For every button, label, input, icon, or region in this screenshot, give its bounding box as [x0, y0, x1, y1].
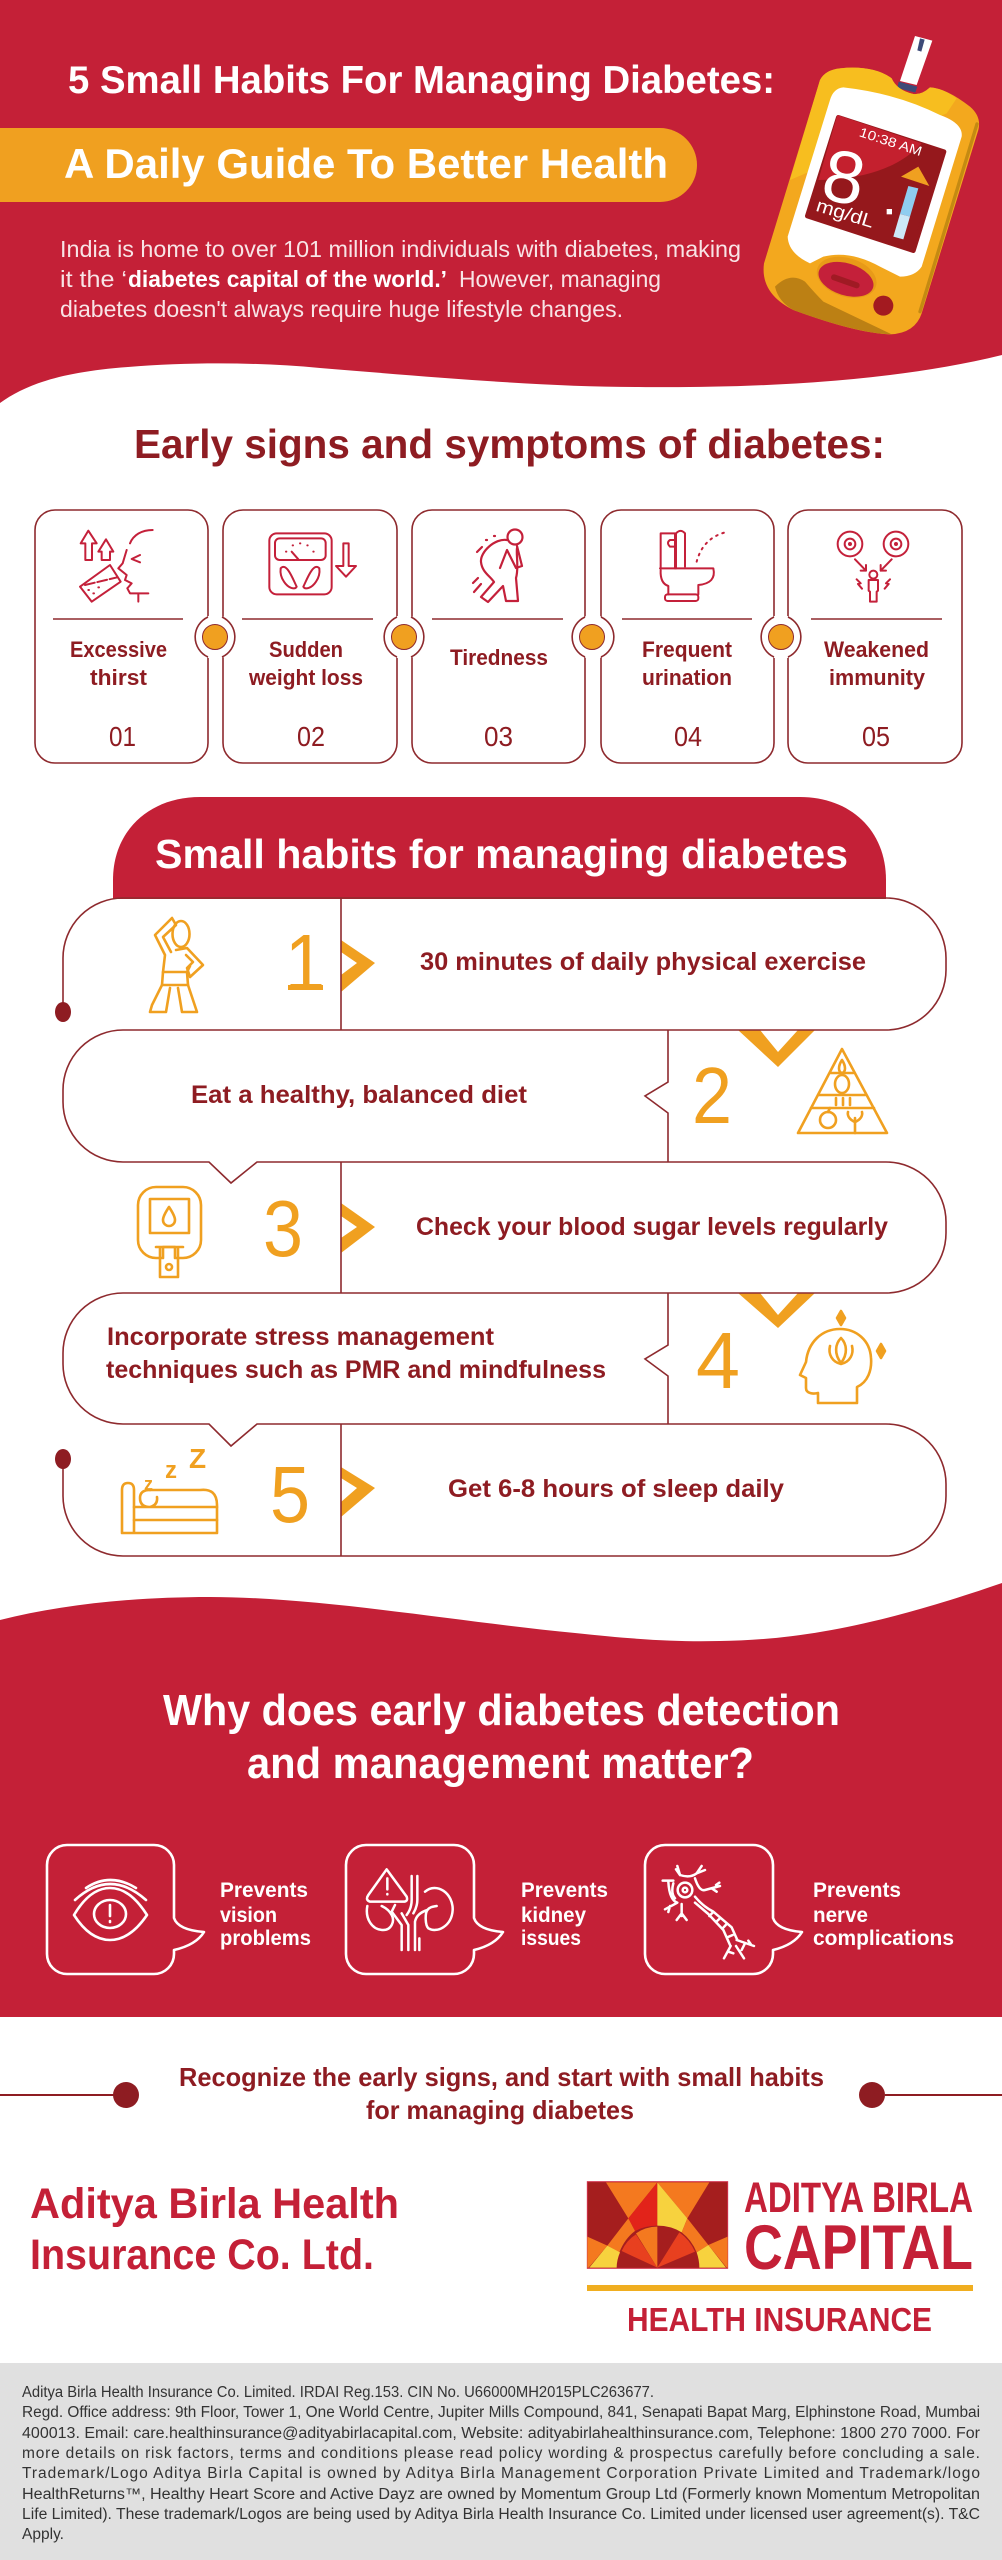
company name: Insurance Co. Ltd.: [30, 2231, 374, 2279]
habit numbers: [263, 918, 740, 1539]
card outlines: [35, 510, 962, 763]
icon: toilet: [660, 531, 728, 601]
logo: Aditya Birla Capital: HEALTH INSURANCE: [627, 2301, 932, 2338]
benefit labels: nerve: [813, 1904, 868, 1927]
benefit labels: problems: [220, 1927, 311, 1950]
habit numbers: 4: [696, 1316, 740, 1405]
habits heading tab: [113, 797, 886, 899]
habit texts: Eat a healthy, balanced diet: [191, 1081, 528, 1109]
icon: excessive thirst: [80, 530, 153, 602]
icon: neuron: [663, 1866, 754, 1958]
icon: sleeping in bed: z: [165, 1457, 177, 1484]
intro paragraph: [60, 236, 741, 322]
icon: sleeping in bed: Z: [189, 1443, 206, 1474]
call to action: for managing diabetes: [366, 2095, 634, 2125]
habit texts: Check your blood sugar levels regularly: [416, 1213, 888, 1241]
section heading: Why does early diabetes detection: [163, 1686, 840, 1735]
benefit labels: vision: [220, 1904, 277, 1927]
panel: legal disclaimer: Regd. Office address: 9th Floor, Tower 1, One World Centre, Jupiter Mills Compound, 841, Senapati Bapat Marg, Elphinstone Road, Mumbai: [22, 2404, 980, 2421]
icon: kidney warning: [367, 1869, 453, 1950]
logo: Aditya Birla Capital: [587, 2174, 973, 2338]
habit numbers: 3: [263, 1184, 303, 1273]
subtitle pill: A Daily Guide To Better Health: [64, 140, 668, 187]
panel: why early detection matters: [0, 1583, 1002, 2017]
speech-box outlines: [47, 1845, 802, 1974]
title: 5 Small Habits For Managing Diabetes:: [68, 59, 775, 102]
icon: tiredness person: [473, 530, 522, 602]
card numbers: 05: [862, 721, 890, 752]
icon: blood sugar meter: [138, 1187, 201, 1277]
intro paragraph: it the ‘: [60, 266, 127, 292]
habit texts: Incorporate stress management: [107, 1323, 495, 1351]
section heading: and management matter?: [247, 1739, 754, 1788]
connector dots: [193, 615, 803, 659]
panel: legal disclaimer: Aditya Birla Health Insurance Co. Limited. IRDAI Reg.153. CIN No. U66000MH2015PLC263677.: [22, 2384, 654, 2401]
intro paragraph: India is home to over 101 million individuals with diabetes, making: [60, 236, 741, 262]
symptom labels: immunity: [829, 665, 926, 690]
company name: Aditya Birla Health: [30, 2180, 399, 2228]
icon: weakened immunity: [838, 532, 908, 602]
intro paragraph: However, managing: [459, 266, 661, 292]
icon: exercise person: [150, 918, 203, 1012]
heading: early signs: Early signs and symptoms of diabetes:: [134, 421, 885, 467]
habits heading tab: Small habits for managing diabetes: [155, 831, 848, 877]
benefit labels: [220, 1879, 954, 1950]
symptom labels: thirst: [90, 665, 148, 690]
panel: legal disclaimer: Life Limited). These trademark/Logos are being used by Aditya Birla Health Insurance Co. Limited under licensed user agreement(s). T&C: [22, 2506, 980, 2523]
benefit labels: kidney: [521, 1904, 586, 1927]
icon: glucose meter: [764, 36, 979, 334]
company name: [30, 2180, 399, 2279]
card numbers: 04: [674, 721, 702, 752]
icon: weight scale: [269, 533, 356, 594]
icon: sleeping in bed: z: [144, 1474, 153, 1494]
habit texts: Get 6-8 hours of sleep daily: [448, 1475, 784, 1503]
icon: eye warning: [74, 1880, 147, 1940]
symptom labels: Frequent: [642, 637, 733, 662]
card numbers: 03: [484, 721, 513, 752]
symptom labels: weight loss: [248, 665, 363, 690]
call to action: Recognize the early signs, and start with small habits: [179, 2062, 824, 2092]
habit texts: techniques such as PMR and mindfulness: [106, 1356, 606, 1384]
panel: symptom cards: [35, 510, 962, 763]
panel: legal disclaimer: [0, 2363, 1002, 2560]
icon: glucose meter: 10:38 AM: [857, 125, 924, 159]
panel: legal disclaimer: Apply.: [22, 2526, 64, 2543]
symptom labels: urination: [642, 665, 732, 690]
symptom labels: Sudden: [269, 637, 343, 662]
habit row outlines: [63, 898, 946, 1556]
panel: small habits: [55, 797, 946, 1556]
icon: mindful head: [800, 1311, 885, 1403]
symptom labels: Tiredness: [450, 645, 548, 670]
panel: legal disclaimer: Trademark/Logo Aditya Birla Capital is owned by Aditya Birla Management Corporation Private Limited and Trademark/logo: [22, 2465, 980, 2482]
symptom labels: Weakened: [824, 637, 929, 662]
card numbers: 02: [297, 721, 325, 752]
intro paragraph: diabetes capital of the world.’: [128, 266, 447, 292]
panel: legal disclaimer: HealthReturns™, Healthy Heart Score and Active Dayz are owned by Momentum Group Ltd (Formerly known Momentum Metropolitan: [22, 2486, 980, 2503]
benefit labels: Prevents: [220, 1879, 308, 1902]
benefit labels: Prevents: [521, 1879, 608, 1902]
benefit labels: complications: [813, 1927, 954, 1950]
symptom labels: [70, 637, 929, 690]
symptom labels: Excessive: [70, 637, 167, 662]
habit numbers: 1: [285, 918, 325, 1007]
call to action: [0, 2062, 1002, 2125]
section heading: [163, 1686, 840, 1788]
card numbers: 01: [109, 721, 136, 752]
habit numbers: 5: [270, 1450, 310, 1539]
icon: glucose meter: 8: [816, 133, 871, 222]
panel: header banner: [0, 0, 1002, 403]
benefit labels: Prevents: [813, 1879, 901, 1902]
habit texts: 30 minutes of daily physical exercise: [420, 948, 866, 976]
habit texts: [106, 948, 888, 1503]
icon: sleeping in bed: [122, 1443, 217, 1533]
subtitle pill: [0, 128, 697, 202]
icon: food pyramid: [798, 1049, 887, 1133]
habit numbers: 2: [692, 1051, 732, 1140]
logo mark: [587, 2182, 728, 2268]
intro paragraph: diabetes doesn't always require huge lifestyle changes.: [60, 296, 623, 322]
timeline end markers: [55, 1002, 71, 1469]
panel: legal disclaimer: more details on risk factors, terms and conditions please read policy wording & prospectus carefully before concluding a sale.: [22, 2445, 980, 2462]
benefit labels: issues: [521, 1927, 581, 1950]
icon: glucose meter: mg/dL: [814, 194, 877, 232]
card numbers: [109, 721, 890, 752]
arrows: orange chevrons: [341, 940, 815, 1517]
panel: legal disclaimer: 400013. Email: care.healthinsurance@adityabirlacapital.com, Website: adityabirlahealthinsurance.com, Telephone: 1800 270 7000. For: [22, 2425, 980, 2442]
